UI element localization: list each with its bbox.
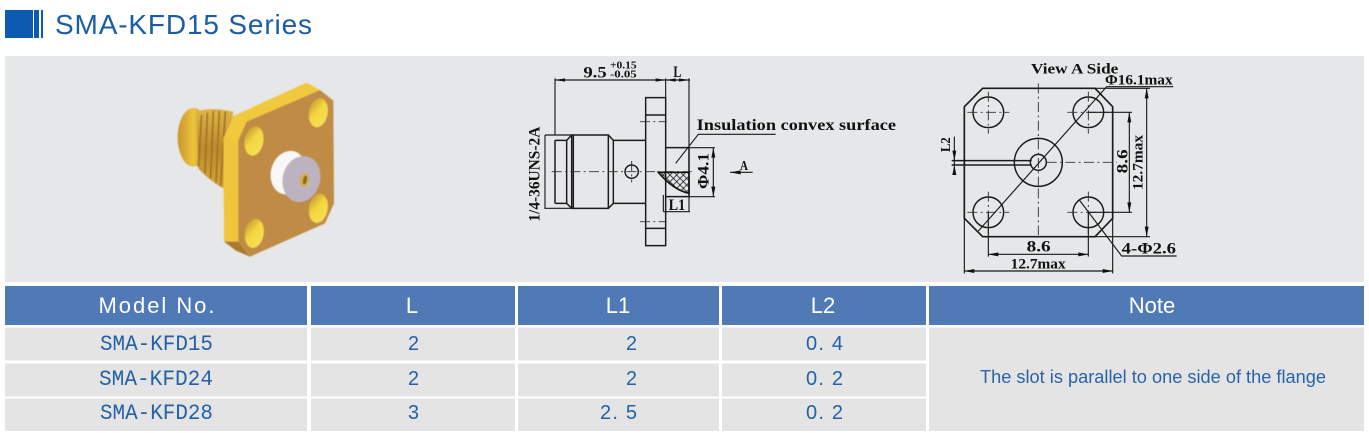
dimension: width right: 12.7max [1131, 134, 1147, 190]
dimension: tolerance [610, 60, 637, 81]
arrowheads [555, 78, 741, 197]
flange outline [964, 88, 1113, 237]
product photo: connector [178, 83, 334, 257]
dimension: diagonal: Φ16.1max [1105, 72, 1173, 88]
dimension: tolerance: -0.05 [610, 70, 637, 81]
dimension lines [545, 78, 776, 212]
label: view side: View A Side [1031, 61, 1119, 77]
table row: SMA-KFD28: 2. 5 [600, 402, 637, 424]
side view drawing [526, 60, 896, 246]
view marker A: A [740, 159, 748, 174]
dimension: L1: L1 [669, 197, 685, 214]
slot [952, 161, 1032, 165]
table row: SMA-KFD24: 0. 2 [806, 368, 843, 390]
table header row: Note [1129, 293, 1175, 318]
dimension: tolerance: +0.15 [610, 60, 637, 71]
table row: SMA-KFD24: SMA-KFD24 [99, 367, 213, 392]
table row: SMA-KFD15: 2 [626, 333, 637, 355]
mounting holes [973, 97, 1104, 228]
dimension: length: 9.5 [583, 65, 607, 82]
table row: SMA-KFD24: 2 [626, 368, 637, 390]
dimension: diameter: Φ4.1 [695, 153, 712, 189]
centre lines [967, 83, 1117, 235]
dimension: thread: 1/4-36UNS-2A [526, 127, 543, 222]
panel: product drawings [5, 56, 1364, 282]
table row: SMA-KFD24: 2 [408, 368, 419, 390]
front view drawing [939, 61, 1177, 273]
dimension: L: L [673, 64, 681, 81]
table cell backgrounds [5, 328, 1364, 431]
callout: insulation: Insulation convex surface [697, 117, 896, 134]
heading icon: blue bars [5, 10, 43, 38]
table header row: L2 [811, 293, 835, 318]
table row: SMA-KFD15: 2 [408, 333, 419, 355]
table row: SMA-KFD28: 0. 2 [806, 402, 843, 424]
hatched section [658, 172, 689, 193]
table note: The slot is parallel to one side of the flange [980, 367, 1326, 387]
dimension: L2: L2 [939, 137, 954, 152]
table: model dimensions [5, 286, 1364, 431]
arrowheads [952, 88, 1149, 273]
table header row: L [406, 293, 418, 318]
table row: SMA-KFD28 [100, 401, 843, 426]
table header row [5, 286, 1364, 325]
table row: SMA-KFD28: 3 [408, 402, 419, 424]
dimension: hole spacing right: 8.6 [1114, 149, 1131, 173]
dimension: hole spacing bottom: 8.6 [1027, 239, 1051, 256]
table row: SMA-KFD15: 0. 4 [806, 333, 843, 355]
table row: SMA-KFD28: SMA-KFD28 [100, 401, 213, 426]
dimension: width bottom: 12.7max [1011, 256, 1066, 272]
dimension lines [954, 87, 1177, 273]
table row: SMA-KFD15: SMA-KFD15 [100, 332, 213, 357]
table row: SMA-KFD24 [99, 367, 843, 392]
heading title: SMA-KFD15 Series [55, 9, 312, 40]
centre lines [552, 122, 692, 222]
table header row: Model No. [98, 293, 214, 318]
section heading [5, 9, 312, 40]
dimension: hole diameter: 4-Φ2.6 [1122, 240, 1176, 257]
table header row: L1 [606, 293, 630, 318]
flange and body outline [555, 98, 689, 246]
table row: SMA-KFD15 [100, 332, 843, 357]
